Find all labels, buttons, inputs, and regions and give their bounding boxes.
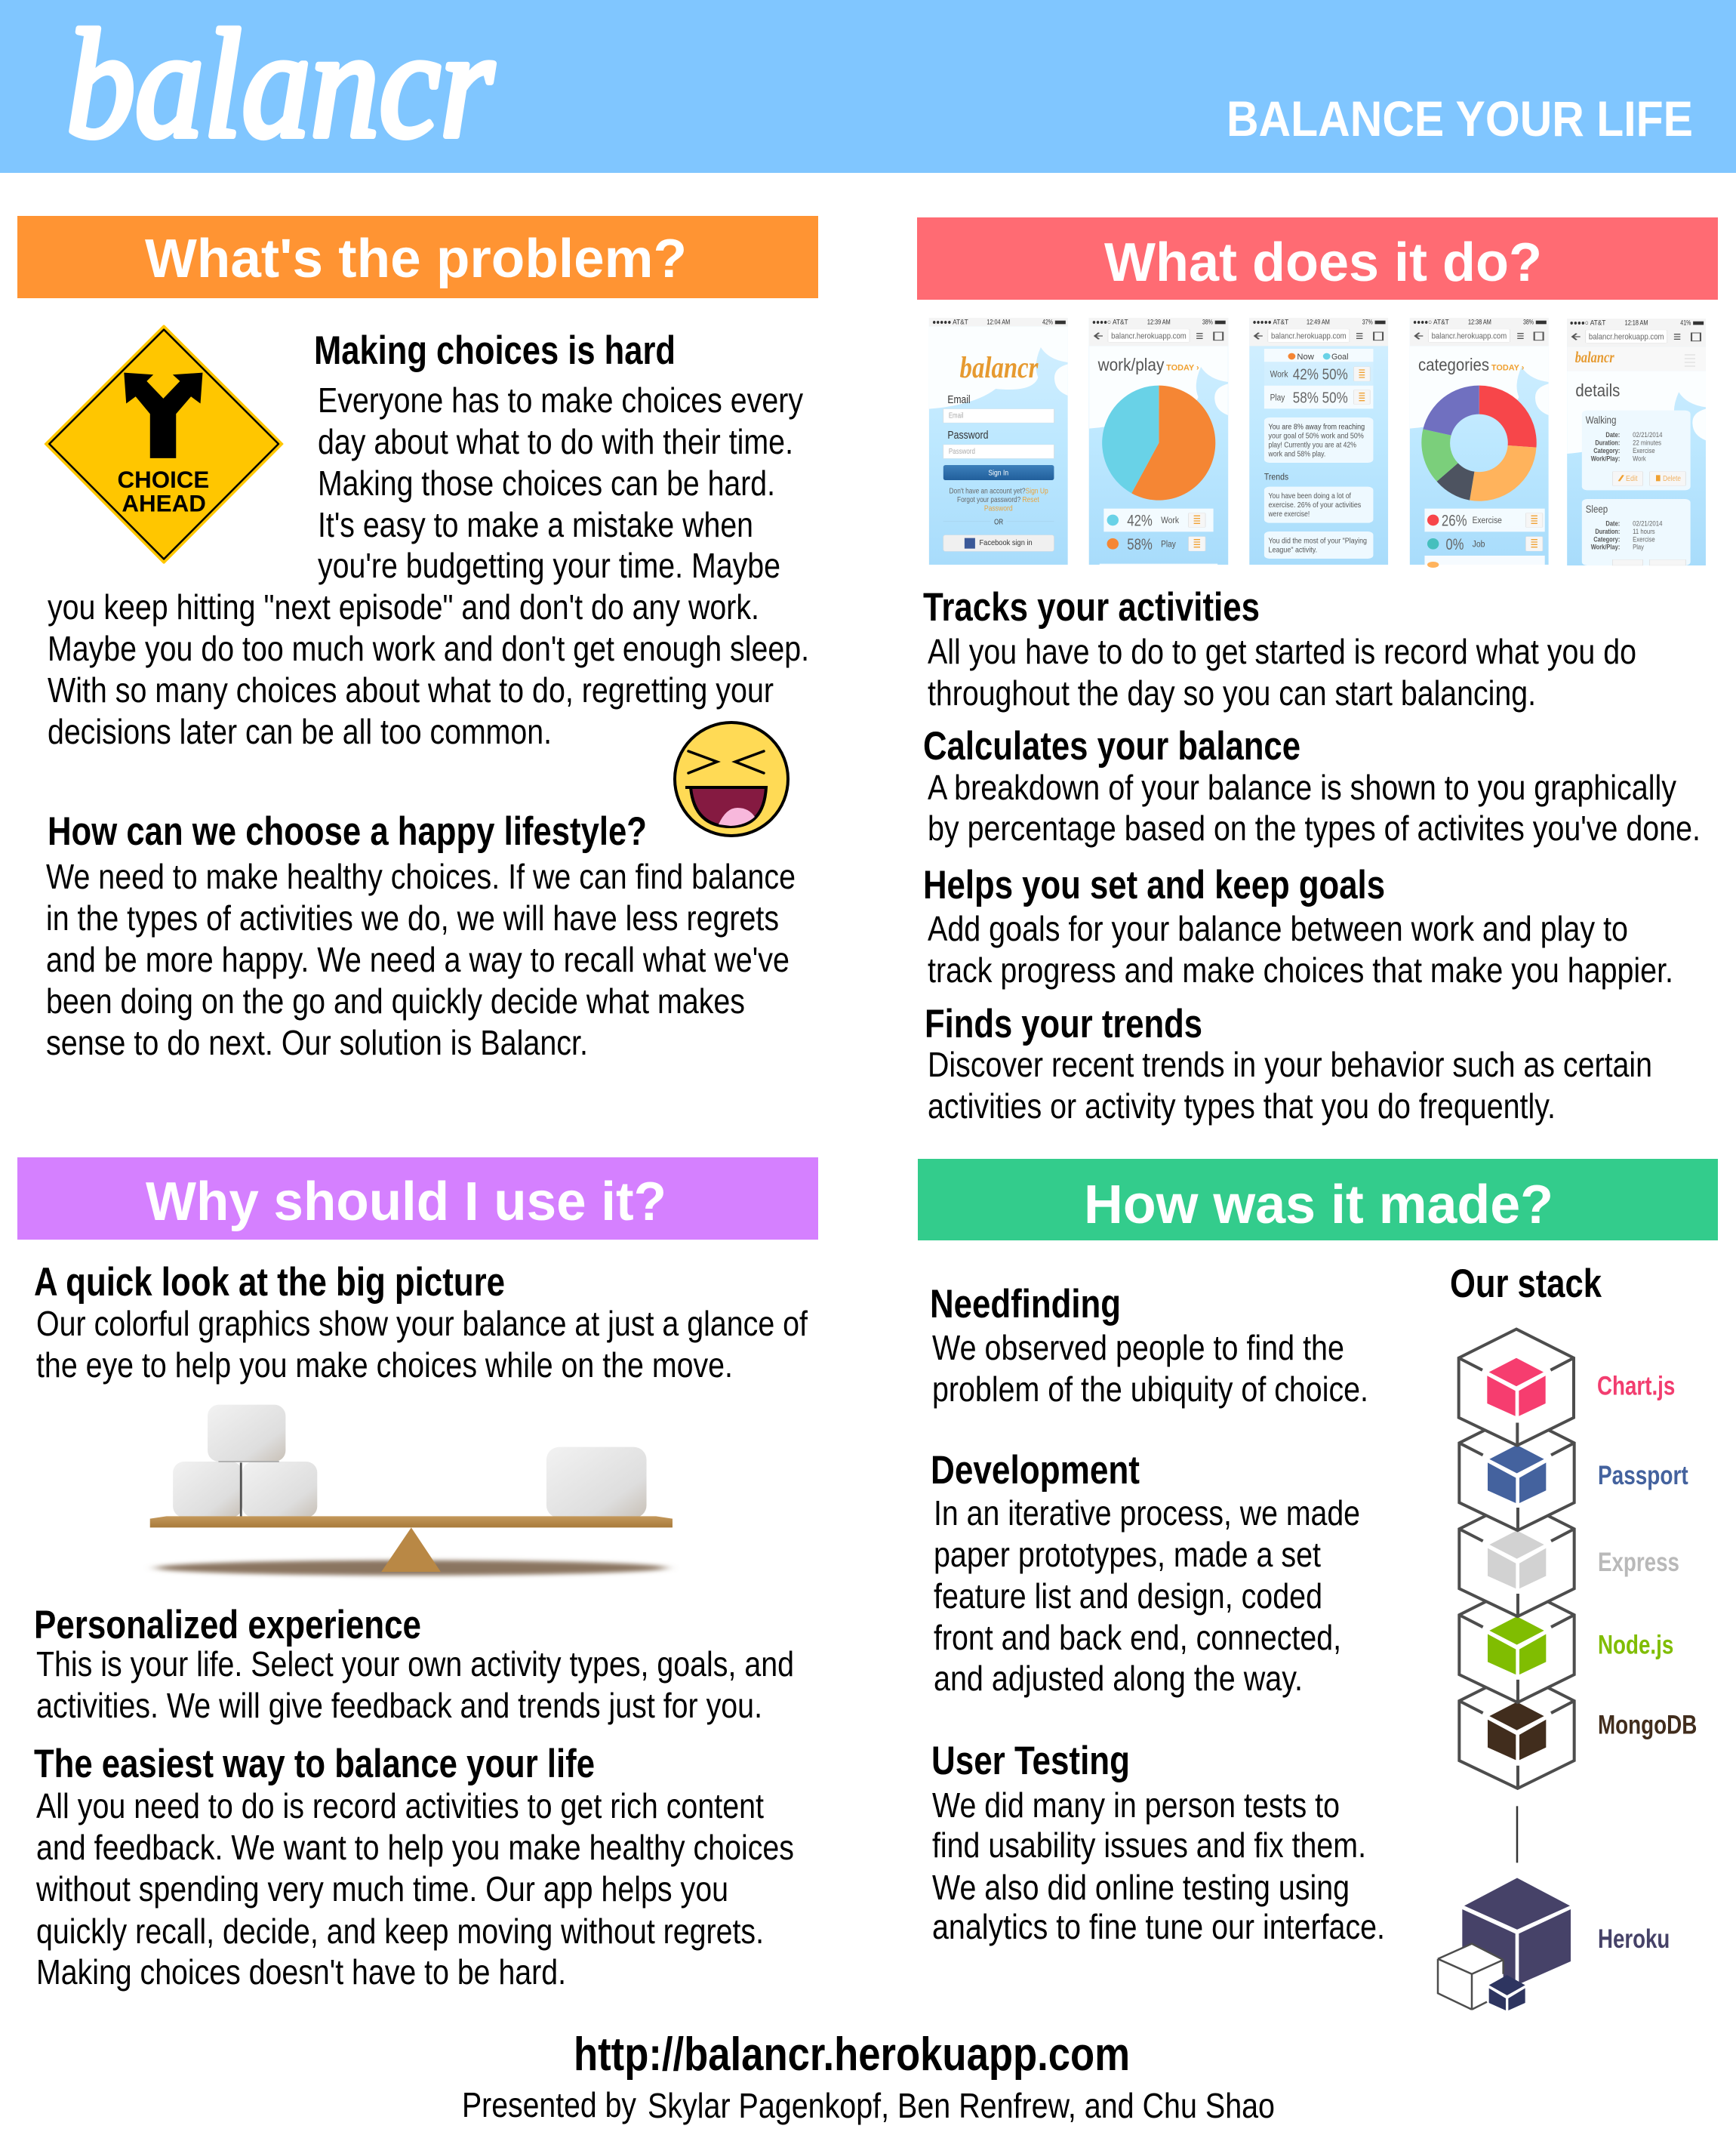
- illustration: balance scale with cubes: [150, 1405, 673, 1576]
- screenshot: activity details: 11 hours: [1633, 528, 1655, 535]
- screenshot: login: Email: [949, 411, 963, 420]
- text block: healthy choices: been doing on the go and quickly decide what makes: [46, 981, 745, 1021]
- screenshot: categories donut chart: ●●●●○ AT&T: [1413, 319, 1449, 326]
- stack layer: MongoDB: MongoDB: [1598, 1710, 1697, 1739]
- screenshot: work/play pie chart: TODAY ›: [1166, 363, 1199, 372]
- screenshot: activity details: details: [1575, 380, 1620, 400]
- heading band: why should I use it: Why should I use it?: [146, 1172, 666, 1232]
- feature list: Calculates your balance: [923, 724, 1300, 769]
- screenshot: login: Facebook sign in: [980, 538, 1033, 547]
- stack diagram: [1438, 1329, 1697, 2010]
- screenshot: login: Password: [947, 429, 988, 442]
- reason: easiest way: All you need to do is record activities to get rich content: [36, 1786, 764, 1825]
- icon: choice ahead road sign: [45, 325, 282, 563]
- reason: easiest way: Making choices doesn't have to be hard.: [36, 1952, 566, 1992]
- screenshot: work/play pie chart: 38%: [1202, 319, 1213, 326]
- screenshot: login: Reset: [1022, 495, 1039, 504]
- step: development: [931, 1448, 1360, 1698]
- screenshot: activity details: 12:18 AM: [1625, 319, 1648, 327]
- screenshot: activity details: Play: [1633, 544, 1644, 551]
- step: development: front and back end, connected,: [934, 1618, 1341, 1657]
- screenshot: login: Don't have an account yet?: [950, 487, 1026, 495]
- stack layer: Heroku: [1438, 1878, 1670, 2010]
- screenshot: work/play pie chart: Play: [1161, 539, 1176, 549]
- screenshot: goals and trends: Play: [1270, 393, 1285, 403]
- screenshot: goals and trends: Work: [1270, 369, 1288, 380]
- screenshot: login: OR: [994, 518, 1003, 526]
- heading band: what's the problem: [17, 216, 818, 298]
- reason: personalized: This is your life. Select your own activity types, goals, and: [36, 1644, 794, 1684]
- feature list: throughout the day so you can start balancing.: [928, 673, 1536, 713]
- screenshot: work/play pie chart: ●●●●○ AT&T: [1092, 319, 1128, 326]
- feature list: Add goals for your balance between work and play to: [928, 909, 1628, 948]
- screenshot: login: balancr: [960, 351, 1039, 384]
- subheading: our stack: Our stack: [1450, 1262, 1602, 1306]
- text block: healthy choices: and be more happy. We need a way to recall what we've: [46, 940, 790, 979]
- icon: choice ahead road sign: AHEAD: [122, 491, 206, 517]
- stack layer: Express: Express: [1598, 1547, 1679, 1576]
- heading band: what does it do: What does it do?: [1104, 233, 1542, 293]
- heading band: how was it made: How was it made?: [1084, 1175, 1553, 1235]
- screenshot: login: ●●●●● AT&T: [932, 319, 968, 326]
- heading band: how was it made: [918, 1159, 1718, 1240]
- screenshot: activity details: Exercise: [1633, 535, 1655, 544]
- reason: personalized: Personalized experience: [34, 1603, 421, 1647]
- footer url: http://balancr.herokuapp.com: [574, 2029, 1130, 2081]
- screenshot: categories donut chart: TODAY ›: [1491, 363, 1524, 372]
- stack layer: Heroku: Heroku: [1598, 1924, 1670, 1954]
- screenshot: categories donut chart: 38%: [1523, 319, 1534, 326]
- screenshot: activity details: 41%: [1680, 319, 1691, 327]
- reason: easiest way: [34, 1742, 794, 1992]
- screenshot: goals and trends: 58% 50%: [1293, 389, 1348, 406]
- reason: big picture: A quick look at the big picture: [34, 1260, 505, 1305]
- tagline: BALANCE YOUR LIFE: [1227, 91, 1693, 146]
- screenshot: activity details: Category:: [1593, 447, 1620, 454]
- step: user testing: [931, 1739, 1385, 1946]
- text block: making choices: day about what to do with their time.: [318, 422, 793, 461]
- step: user testing: find usability issues and fix them.: [932, 1825, 1366, 1865]
- screenshot: activity details: Delete: [1663, 474, 1681, 482]
- screenshot: goals and trends: You are 8% away from reaching: [1269, 423, 1365, 431]
- screenshot: activity details: Category:: [1593, 535, 1620, 544]
- step: development: paper prototypes, made a set: [934, 1535, 1321, 1574]
- presenters credit: Presented by: [462, 2085, 636, 2124]
- subheading: how can we choose: How can we choose a happy lifestyle?: [48, 809, 647, 854]
- screenshot: work/play pie chart: Work: [1161, 516, 1179, 525]
- screenshot: activity details: Work/Play:: [1591, 544, 1620, 551]
- screenshot: goals and trends: 12:49 AM: [1307, 319, 1330, 326]
- text block: making choices: [48, 380, 809, 751]
- step: user testing: User Testing: [931, 1739, 1130, 1783]
- screenshot: work/play pie chart: 12:39 AM: [1147, 319, 1171, 326]
- stack layer: Passport: [1459, 1414, 1688, 1530]
- screenshot: activity details: Work: [1633, 454, 1646, 463]
- screenshot: categories donut chart: [1410, 318, 1549, 568]
- reason: easiest way: quickly recall, decide, and keep moving without regrets.: [36, 1912, 764, 1951]
- screenshot: goals and trends: work and 58% play.: [1268, 450, 1325, 458]
- stack layer: Express: [1459, 1500, 1679, 1616]
- step: user testing: We did many in person tests to: [932, 1785, 1340, 1825]
- heading band: what does it do: [917, 217, 1718, 300]
- screenshot: login: Email: [947, 393, 971, 406]
- text block: making choices: you're budgetting your time. Maybe: [318, 546, 780, 585]
- screenshot: activity details: Duration:: [1595, 439, 1620, 447]
- stack layer: Chart.js: Chart.js: [1597, 1371, 1675, 1400]
- text block: healthy choices: in the types of activities we do, we will have less regrets: [46, 898, 779, 938]
- step: user testing: analytics to fine tune our interface.: [932, 1907, 1385, 1946]
- text block: making choices: It's easy to make a mistake when: [318, 505, 753, 544]
- feature list: Finds your trends: [925, 1002, 1202, 1046]
- connector line: [1516, 1806, 1518, 1862]
- presenters credit: Skylar Pagenkopf, Ben Renfrew, and Chu Shao: [648, 2086, 1275, 2125]
- icon: laughing smiley: [675, 722, 788, 836]
- screenshot: activity details: balancr: [1575, 349, 1614, 366]
- text block: making choices: Making those choices can be hard.: [318, 464, 775, 503]
- step: development: In an iterative process, we made: [934, 1493, 1360, 1533]
- screenshot: activity details: Walking: [1586, 414, 1616, 426]
- reason: easiest way: The easiest way to balance your life: [34, 1742, 595, 1786]
- screenshot: activity details: [1567, 319, 1706, 565]
- text block: healthy choices: sense to do next. Our solution is Balancr.: [46, 1023, 588, 1062]
- screenshot: goals and trends: You did the most of your "Playing: [1269, 537, 1367, 545]
- screenshot: login: Sign In: [988, 469, 1008, 477]
- panel: how was it made: [918, 1159, 1718, 2010]
- text block: making choices: With so many choices about what to do, regretting your: [48, 670, 774, 710]
- screenshot: activity details: 02/21/2014: [1633, 520, 1663, 528]
- text block: healthy choices: [46, 857, 796, 1062]
- step: user testing: We also did online testing using: [932, 1868, 1350, 1907]
- screenshot: login: Password: [984, 504, 1013, 513]
- text block: making choices: decisions later can be all too common.: [48, 712, 552, 751]
- screenshot: categories donut chart: 0%: [1446, 535, 1464, 553]
- screenshot: goals and trends: 37%: [1362, 319, 1373, 326]
- screenshot: goals and trends: your goal of 50% work and 50%: [1269, 432, 1364, 440]
- screenshot: activity details: ●●●●○ AT&T: [1570, 319, 1606, 327]
- subheading: making choices is hard: Making choices is hard: [314, 328, 676, 373]
- screenshot: goals and trends: Goal: [1331, 352, 1348, 361]
- screenshot: activity details: 22 minutes: [1633, 439, 1661, 447]
- reason: big picture: the eye to help you make choices while on the move.: [36, 1345, 733, 1385]
- step: development: and adjusted along the way.: [934, 1659, 1303, 1698]
- feature list: activities or activity types that you do frequently.: [928, 1086, 1556, 1126]
- screenshot: work/play pie chart: 42%: [1127, 512, 1153, 530]
- screenshot: login: Forgot your password?: [957, 495, 1020, 504]
- screenshot: goals and trends: League" activity.: [1269, 546, 1317, 554]
- screenshot: activity details: Date:: [1605, 431, 1620, 439]
- step: needfinding: Needfinding: [930, 1282, 1121, 1326]
- icon: choice ahead road sign: CHOICE: [118, 467, 209, 493]
- reason: big picture: Our colorful graphics show your balance at just a glance of: [36, 1304, 808, 1343]
- screenshot: categories donut chart: Job: [1473, 539, 1485, 549]
- screenshot: goals and trends: balancr.herokuapp.com: [1271, 331, 1347, 340]
- panel: why should I use it: [17, 1157, 818, 1992]
- screenshot: categories donut chart: 26%: [1442, 512, 1467, 530]
- screenshot: goals and trends: play! Currently you are at 42%: [1269, 441, 1356, 449]
- stack layer: MongoDB: [1459, 1672, 1697, 1788]
- feature list: Tracks your activities: [923, 585, 1260, 630]
- heading band: what's the problem: What's the problem?: [145, 229, 687, 289]
- screenshot: goals and trends: ●●●●● AT&T: [1252, 319, 1289, 326]
- feature list: Helps you set and keep goals: [923, 863, 1385, 907]
- feature list: [923, 585, 1701, 1126]
- stack layer: Node.js: Node.js: [1598, 1630, 1673, 1659]
- feature list: All you have to do to get started is record what you do: [928, 632, 1636, 671]
- text block: making choices: Everyone has to make choices every: [318, 380, 803, 420]
- logo wordmark: balancr: [66, 0, 494, 170]
- stack layer: Node.js: [1459, 1586, 1673, 1702]
- screenshot: categories donut chart: balancr.herokuapp.com: [1432, 331, 1507, 340]
- screenshot: activity details: 02/21/2014: [1633, 431, 1663, 439]
- step: needfinding: [930, 1282, 1368, 1409]
- screenshot: work/play pie chart: work/play: [1097, 355, 1165, 374]
- screenshot: goals and trends: were exercise!: [1268, 510, 1310, 518]
- app screenshots row: [929, 318, 1706, 568]
- screenshot: goals and trends: 42% 50%: [1293, 365, 1348, 383]
- screenshot: activity details: Date:: [1605, 520, 1620, 528]
- screenshot: categories donut chart: Exercise: [1473, 516, 1502, 525]
- footer: [462, 2029, 1275, 2125]
- screenshot: work/play pie chart: [1089, 318, 1228, 565]
- text block: making choices: you keep hitting "next episode" and don't do any work.: [48, 587, 759, 627]
- panel: what does it do: [917, 217, 1718, 1126]
- heading band: why should I use it: [17, 1157, 818, 1240]
- step: development: feature list and design, coded: [934, 1576, 1322, 1616]
- screenshot: login: 42%: [1042, 319, 1053, 326]
- screenshot: login: Password: [949, 447, 975, 455]
- screenshot: login: [929, 318, 1068, 565]
- screenshot: goals and trends: [1249, 318, 1388, 565]
- screenshot: login: Sign Up: [1026, 487, 1048, 495]
- stack layer: Passport: Passport: [1598, 1461, 1688, 1490]
- presenters credit: [462, 2085, 1275, 2125]
- screenshot: activity details: Sleep: [1586, 503, 1608, 515]
- reason: easiest way: and feedback. We want to help you make healthy choices: [36, 1828, 794, 1867]
- reason: easiest way: without spending very much time. Our app helps you: [35, 1869, 728, 1909]
- step: needfinding: We observed people to find the: [932, 1328, 1344, 1367]
- screenshot: work/play pie chart: balancr.herokuapp.com: [1111, 331, 1187, 340]
- screenshot: goals and trends: You have been doing a lot of: [1269, 491, 1351, 500]
- step: development: Development: [931, 1448, 1140, 1493]
- screenshot: goals and trends: Trends: [1264, 472, 1288, 482]
- screenshot: work/play pie chart: 58%: [1127, 535, 1153, 553]
- screenshot: login: 12:04 AM: [987, 319, 1010, 326]
- reason: personalized: [34, 1603, 794, 1725]
- screenshot: activity details: Duration:: [1595, 528, 1620, 535]
- reason: big picture: [34, 1260, 808, 1385]
- screenshot: goals and trends: Now: [1297, 352, 1314, 361]
- screenshot: activity details: Exercise: [1633, 447, 1655, 454]
- screenshot: activity details: Work/Play:: [1591, 454, 1620, 463]
- screenshot: categories donut chart: categories: [1418, 355, 1489, 374]
- step: needfinding: problem of the ubiquity of choice.: [932, 1369, 1368, 1409]
- stack layer: Chart.js: [1459, 1329, 1675, 1446]
- reason: personalized: activities. We will give feedback and trends just for you.: [36, 1686, 762, 1725]
- screenshot: goals and trends: exercise. 26% of your activities: [1269, 501, 1361, 509]
- text block: healthy choices: We need to make healthy choices. If we can find balance: [46, 857, 796, 896]
- screenshot: activity details: Edit: [1626, 474, 1638, 482]
- panel: what's the problem: [17, 216, 818, 1062]
- screenshot: categories donut chart: 12:38 AM: [1468, 319, 1491, 326]
- text block: making choices: Maybe you do too much work and don't get enough sleep.: [48, 629, 809, 668]
- header band: [0, 0, 1736, 173]
